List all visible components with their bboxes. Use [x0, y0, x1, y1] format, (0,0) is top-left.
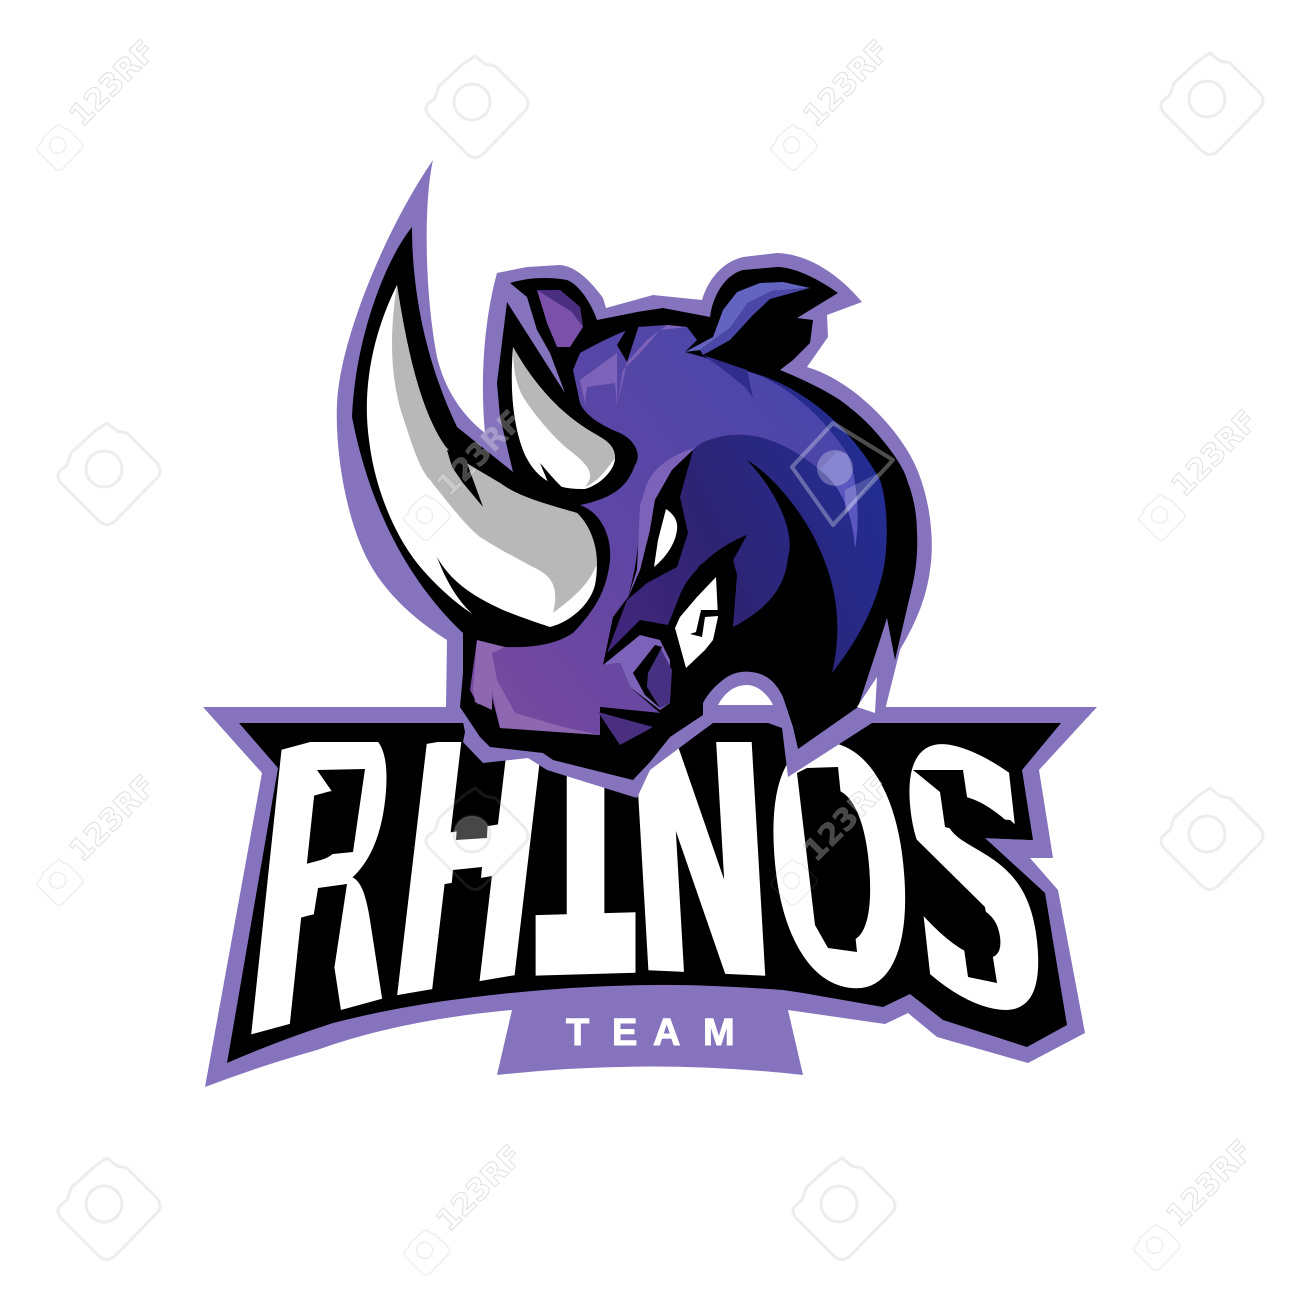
main horn: black crease: [447, 450, 483, 507]
letter counters: [297, 743, 1033, 1020]
letter R: R: [225, 638, 423, 1128]
watermark: 123RF marks: 123RF: [797, 769, 897, 869]
rhino: black silhouette: [352, 227, 917, 780]
teeth: [675, 577, 718, 668]
watermark: 123RF marks: 123RF: [797, 34, 897, 134]
banner: black backing: [227, 723, 1067, 1063]
mouth black line: [603, 535, 747, 680]
second horn: [512, 347, 615, 490]
white gap beside neck: [857, 677, 877, 713]
second horn: white: [512, 347, 615, 489]
nose: dark nostril: [647, 647, 672, 708]
main horn: [367, 285, 597, 633]
light forehead highlights: [580, 325, 687, 408]
right ear: dark strip: [700, 288, 810, 355]
left ear: purple: [537, 290, 583, 347]
left ear inner: [537, 290, 583, 347]
neck light streak: [820, 452, 858, 548]
left ear: dark shade: [537, 290, 583, 327]
teeth notch: [690, 610, 718, 637]
white gap under shoulder: [718, 685, 773, 705]
main horn: white: [367, 285, 597, 630]
banner: [203, 707, 1097, 1087]
nose: light ring: [603, 635, 670, 710]
eye black surround: [627, 450, 693, 600]
lower lip: [598, 707, 670, 760]
team label tab: TEAM: [566, 1012, 735, 1054]
letter H: H: [372, 656, 567, 1077]
nose: black crescent: [633, 645, 662, 708]
letter I: I: [524, 632, 647, 1089]
eye white: [654, 509, 677, 567]
rhino: purple outline: [337, 160, 932, 798]
second horn: black sliver: [540, 463, 565, 490]
watermark: 123RF marks: 123RF: [1165, 404, 1265, 504]
nose: [603, 635, 672, 710]
snout light edge: [473, 640, 600, 735]
banner: purple outline: [203, 707, 1097, 1087]
main horn: grey shade: [392, 285, 597, 613]
right ear: light strip: [685, 282, 810, 352]
watermark: 123RF marks: 123RF: [1160, 1134, 1260, 1234]
second horn: grey shade: [513, 347, 615, 487]
letter S: S: [882, 668, 1068, 1101]
main horn: black sliver: [437, 557, 550, 633]
title: RHINOS: [251, 742, 1038, 1034]
letter N: N: [618, 678, 782, 1046]
watermark: 123RF marks: 123RF: [430, 1139, 530, 1239]
watermark: camera on neck: [792, 423, 893, 525]
black forehead spike: [617, 312, 640, 362]
watermark: 123RF marks: 123RF: [63, 34, 163, 134]
right ear highlight: [685, 282, 810, 355]
face gradient: [470, 325, 858, 735]
lower lip shade: [598, 712, 653, 745]
watermark: 123RF marks: 123RF: [63, 769, 163, 869]
watermark: 123RF marks: 123RF: [430, 404, 530, 504]
dark cheek and neck band: [607, 372, 887, 673]
letter O: O: [754, 673, 926, 1069]
brow crease: [703, 355, 753, 398]
rhino head: [337, 160, 932, 798]
light strip beside eye: [628, 448, 695, 598]
